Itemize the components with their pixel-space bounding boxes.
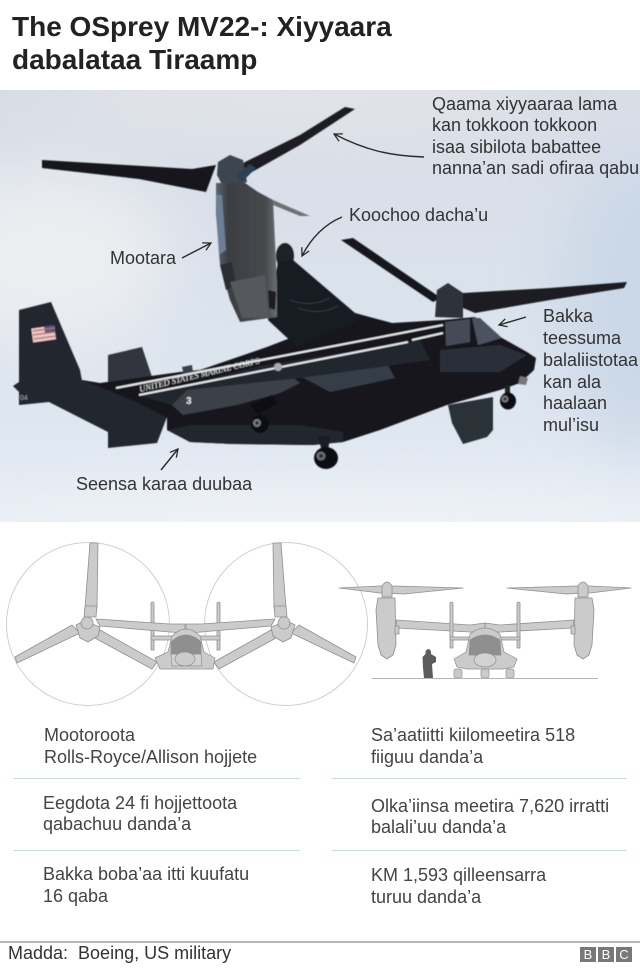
label: rotor blades: Qaama xiyyaaraa lama bbox=[432, 94, 618, 114]
label: cockpit: kan ala bbox=[543, 372, 602, 392]
left rotor and nacelle bbox=[339, 582, 485, 659]
periscope mast bbox=[182, 365, 193, 375]
vertical tail fin bbox=[13, 302, 83, 405]
landing gear bbox=[250, 385, 516, 469]
spec: altitude: balali’uu danda’a bbox=[371, 817, 507, 837]
spec: range bbox=[371, 865, 547, 907]
spec: altitude: Olka’iinsa meetira 7,620 irratti bbox=[371, 796, 609, 816]
source text: Madda: Boeing, US military bbox=[8, 943, 231, 963]
spec: seats bbox=[43, 864, 249, 906]
panel: aircraft photo bbox=[0, 90, 640, 522]
vertical tail fin: 04 bbox=[20, 395, 28, 402]
right rotor and nacelle bbox=[485, 582, 631, 659]
spec: troops: qabachuu danda’a bbox=[43, 814, 192, 834]
aircraft photo illustration bbox=[13, 107, 627, 469]
label: cockpit: teessuma bbox=[543, 328, 622, 348]
rear nacelle bbox=[448, 397, 493, 444]
wing and drive hub bbox=[268, 243, 362, 347]
front nacelle bbox=[216, 183, 277, 322]
label: koochoo dacha'u: Koochoo dacha’u bbox=[349, 205, 488, 225]
label: cockpit bbox=[543, 306, 639, 435]
BBC logo: B bbox=[584, 947, 592, 962]
label: mootara: Mootara bbox=[110, 248, 177, 268]
BBC logo bbox=[580, 947, 632, 962]
rear rotor bbox=[341, 238, 627, 318]
right wing and rotor bbox=[186, 543, 356, 669]
spec: seats: 16 qaba bbox=[43, 886, 109, 906]
diagram: front view with rotor discs bbox=[6, 542, 368, 706]
spec: altitude bbox=[371, 796, 609, 837]
label: seensa: Seensa karaa duubaa bbox=[76, 474, 253, 494]
spec: range: KM 1,593 qilleensarra bbox=[371, 865, 547, 885]
fuselage front bbox=[155, 629, 215, 669]
arrow: to wing fold bbox=[302, 217, 342, 256]
left wing and rotor bbox=[15, 543, 185, 669]
arrow: to rotor blades bbox=[334, 134, 424, 157]
title: dabalataa Tiraamp bbox=[12, 44, 257, 75]
label: cockpit: Bakka bbox=[543, 306, 594, 326]
arrow: to refuelling probe bbox=[161, 449, 178, 470]
spec: range: turuu danda’a bbox=[371, 887, 482, 907]
tail horizontal stabiliser bbox=[49, 380, 167, 448]
spec: speed: Sa’aatiitti kiilomeetira 518 bbox=[371, 725, 575, 745]
spec: engines: Rolls-Royce/Allison hojjete bbox=[44, 747, 257, 767]
arrow: to engine bbox=[182, 243, 211, 258]
person silhouette bbox=[422, 649, 436, 678]
front rotor bbox=[42, 107, 355, 216]
label: rotor blades bbox=[432, 94, 639, 178]
marine corps stripes: UNITED STATES MARINE CORPS bbox=[138, 355, 261, 394]
label: cockpit: mul’isu bbox=[543, 415, 599, 435]
spec: engines: Mootoroota bbox=[44, 725, 136, 745]
arrow: to cockpit bbox=[499, 317, 526, 325]
BBC logo: B bbox=[602, 947, 610, 962]
ground line bbox=[372, 678, 598, 680]
title bbox=[12, 11, 392, 75]
label: rotor blades: kan tokkoon tokkoon bbox=[432, 115, 597, 135]
fuselage and landing gear bbox=[454, 628, 517, 678]
spec: seats: Bakka boba’aa itti kuufatu bbox=[43, 864, 249, 884]
fuselage bbox=[82, 313, 536, 445]
marine corps stripes: 3 bbox=[186, 396, 192, 407]
spec: speed: fiiguu danda’a bbox=[371, 747, 484, 767]
rotor disc circles bbox=[6, 542, 368, 706]
title: The OSprey MV22-: Xiyyaara bbox=[12, 11, 392, 42]
footer rule bbox=[0, 941, 640, 943]
label: cockpit: haalaan bbox=[543, 393, 607, 413]
second tail fin bbox=[108, 347, 155, 392]
spec: troops: Eegdota 24 fi hojjettoota bbox=[43, 793, 238, 813]
label: cockpit: balaliistotaa bbox=[543, 350, 639, 370]
spec: engines bbox=[44, 725, 257, 767]
spec: troops bbox=[43, 793, 238, 834]
photo sky background bbox=[0, 90, 640, 522]
BBC logo: C bbox=[619, 947, 629, 962]
label: rotor blades: nanna’an sadi ofiraa qabu bbox=[432, 158, 639, 178]
label: rotor blades: isaa sibilota babattee bbox=[432, 137, 601, 157]
diagram: front view with person bbox=[339, 582, 631, 678]
spec: speed bbox=[371, 725, 575, 767]
marine corps stripes bbox=[116, 325, 443, 407]
